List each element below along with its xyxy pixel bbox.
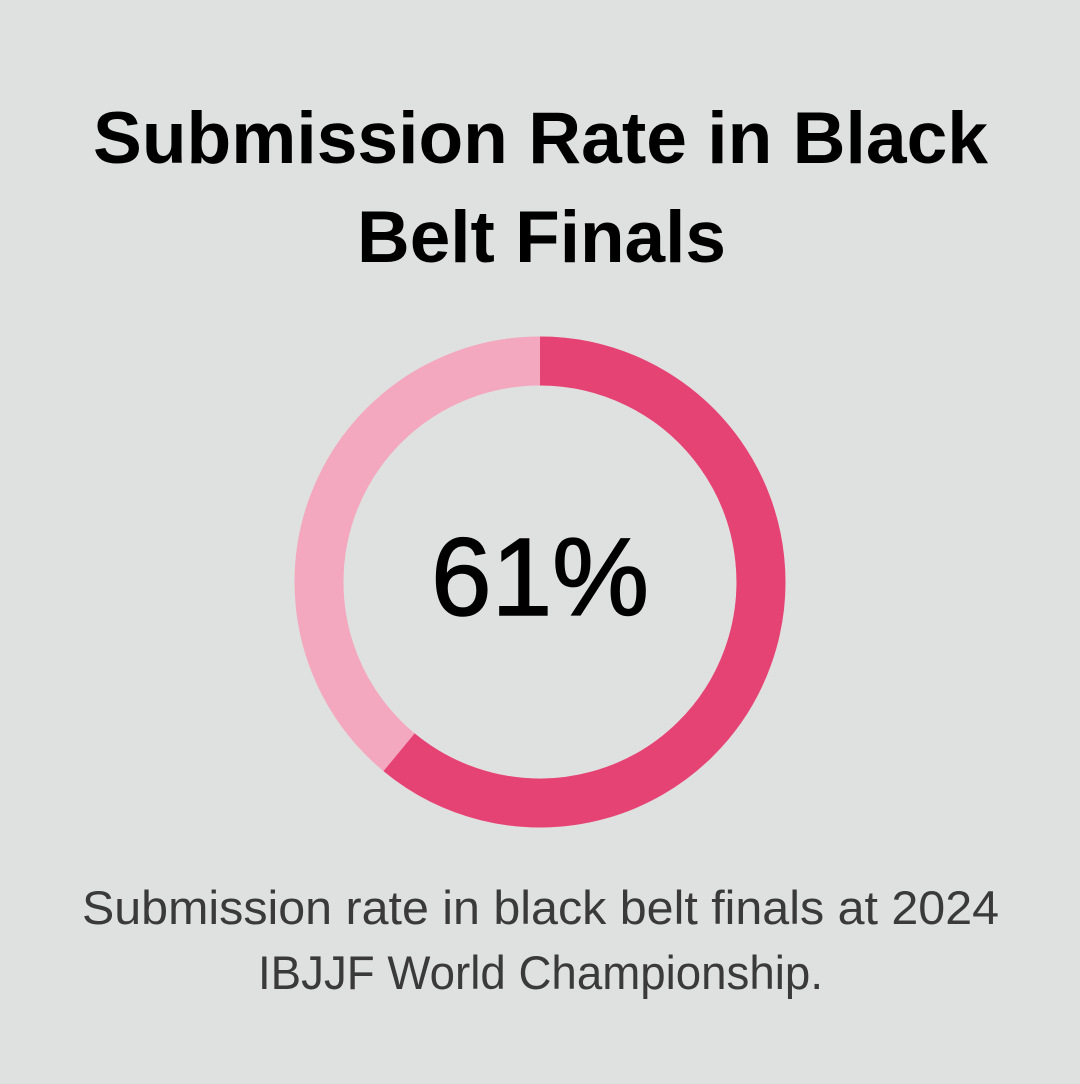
caption: Submission rate in black belt finals at 2024 bbox=[82, 881, 999, 934]
title bbox=[93, 98, 988, 278]
caption: IBJJF World Championship. bbox=[258, 946, 823, 999]
donut chart: 61% bbox=[319, 361, 761, 803]
donut value: 61% bbox=[431, 516, 649, 639]
caption bbox=[82, 881, 999, 999]
title: Belt Finals bbox=[357, 197, 726, 278]
title: Submission Rate in Black bbox=[93, 98, 988, 179]
